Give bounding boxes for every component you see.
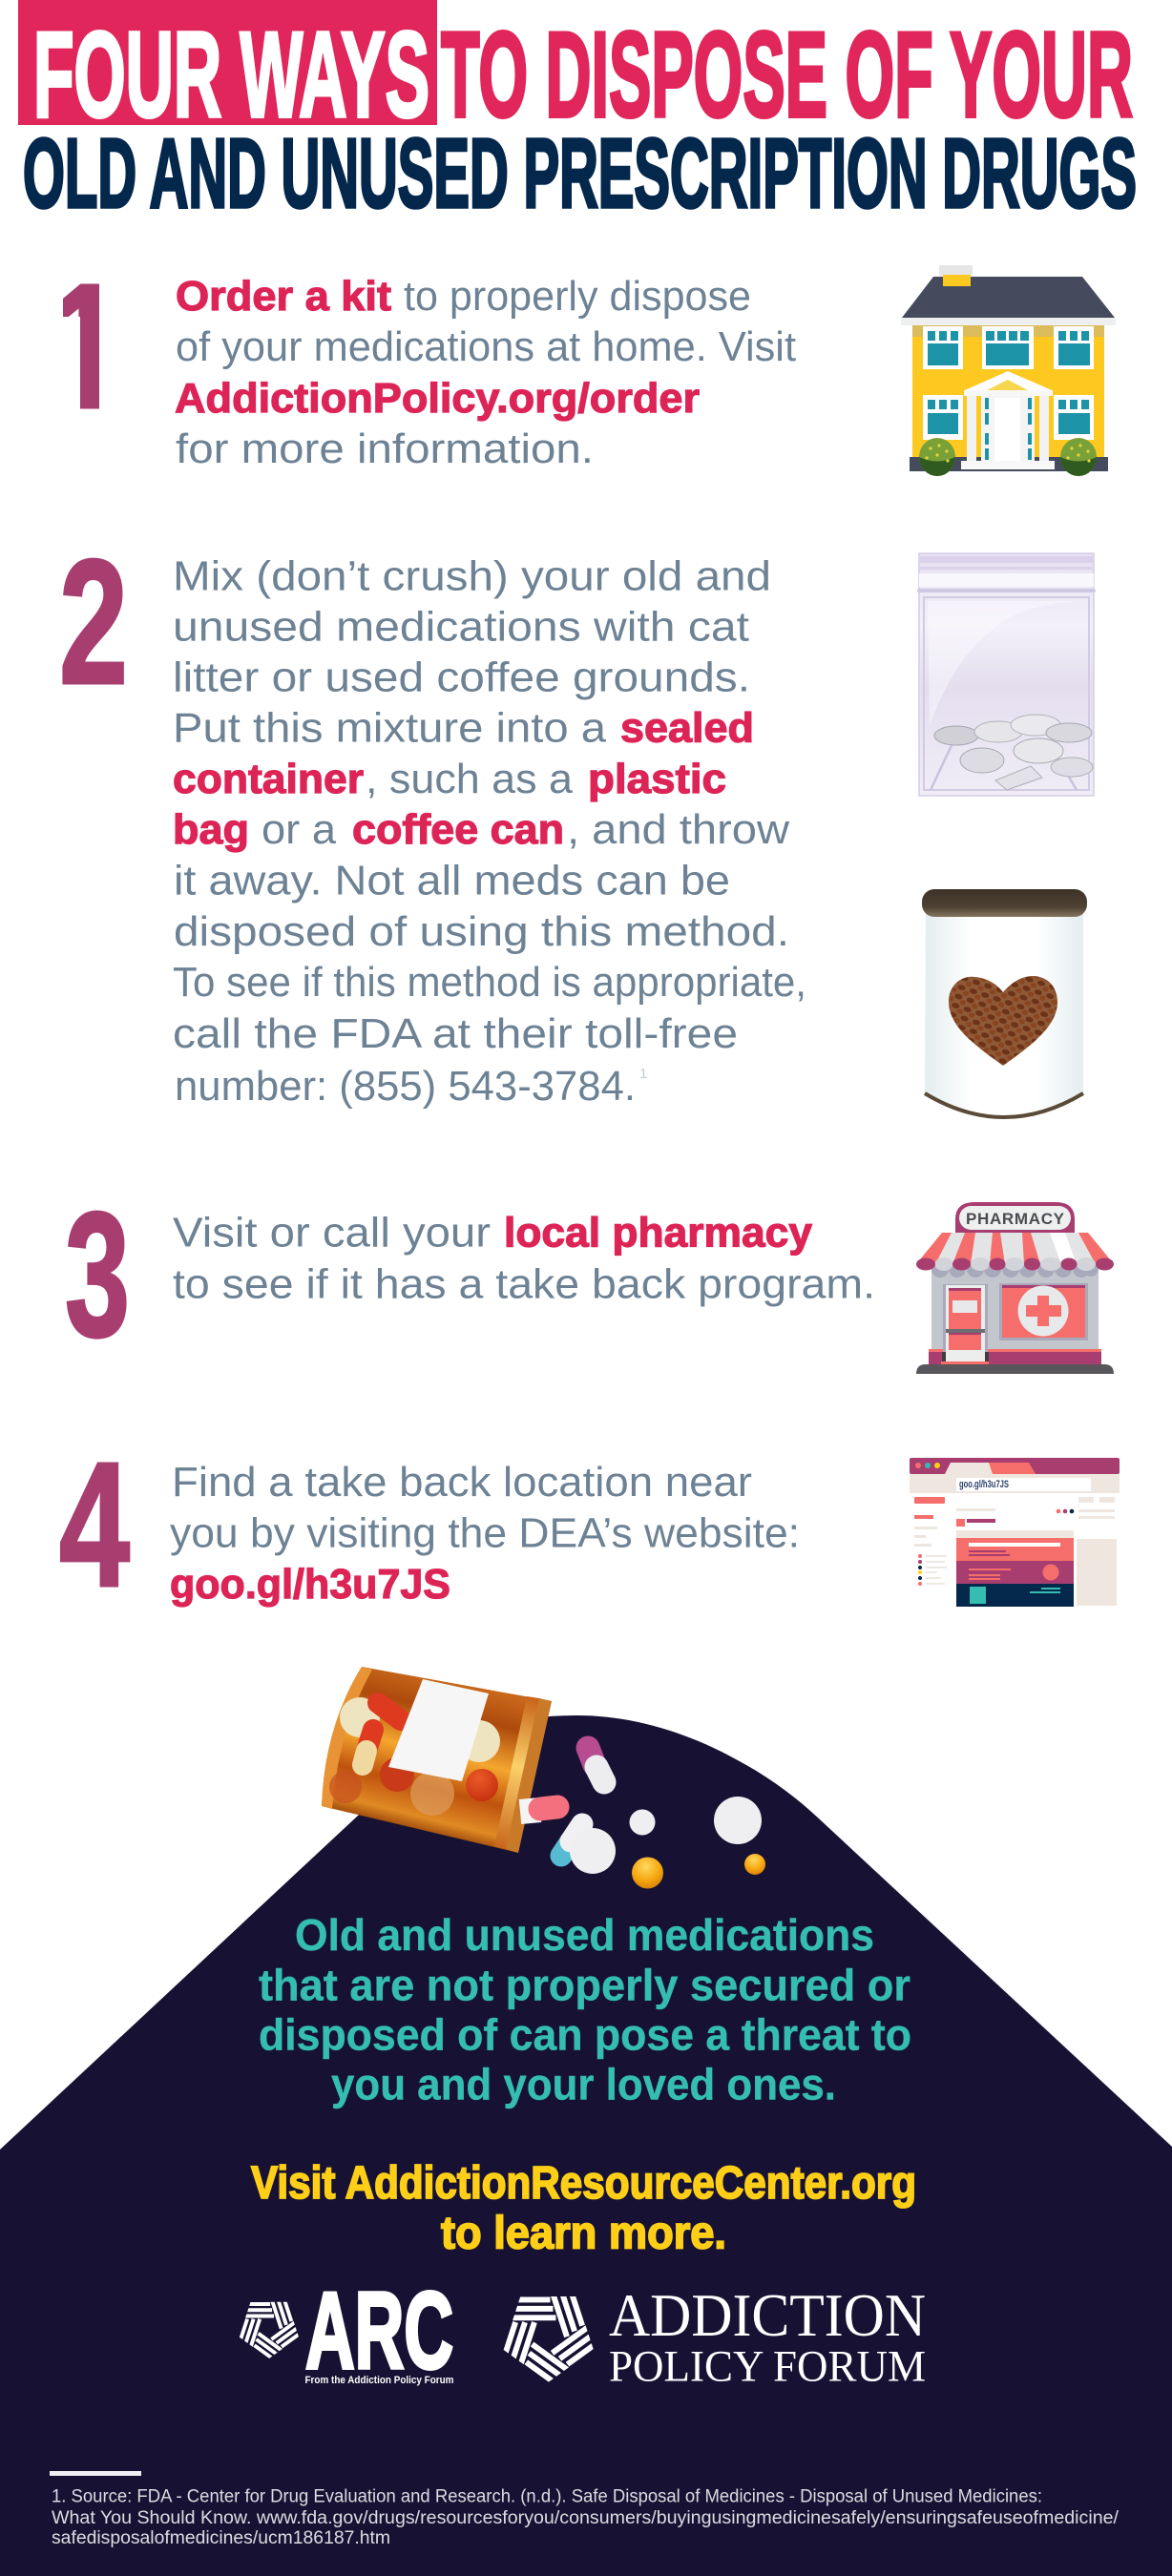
icon: APF pentagon mark (504, 2296, 594, 2381)
step 1 text: Order a kit (176, 273, 391, 320)
call to action: to learn more. (441, 2208, 726, 2259)
step 3 text: local pharmacy (504, 1210, 813, 1256)
step 2 text: Mix (don’t crush) your old and (173, 553, 771, 599)
step 2 text: disposed of using this method. (174, 908, 789, 955)
number 2: 2 (59, 524, 128, 721)
icon: house (901, 265, 1116, 476)
logo: ARC (239, 2290, 453, 2385)
pill: large white front (570, 1828, 616, 1874)
step 4 text: Find a take back location near (172, 1459, 752, 1506)
icon: coffee can with heart of beans (922, 889, 1087, 1117)
pill: gold large (632, 1857, 663, 1889)
step 2 text: 1 (639, 1066, 647, 1082)
step 2 text: call the FDA at their toll-free (173, 1010, 738, 1057)
step 2 text: sealed (620, 704, 754, 752)
capsule: pink and white (520, 1807, 557, 1812)
capsule: magenta and white (588, 1748, 604, 1782)
step 2 text: To see if this method is appropriate, (173, 959, 806, 1006)
callout: warning message: Old and unused medications (295, 1910, 874, 1960)
icon: ARC pentagon mark (239, 2301, 299, 2358)
capsule: blue and white (561, 1824, 582, 1856)
bottle label (388, 1679, 489, 1781)
number 3: 3 (65, 1176, 130, 1374)
step 2 text: container (173, 756, 364, 802)
title highlight box (18, 0, 437, 125)
number 1: 1 (48, 248, 124, 446)
step 2 (59, 524, 1096, 1117)
call to action: Visit AddictionResourceCenter.org (251, 2158, 916, 2209)
footnote rule (50, 2471, 141, 2476)
step 2 text (173, 553, 806, 1110)
step 2 text: , such as a (366, 756, 574, 802)
footnote text: What You Should Know. www.fda.gov/drugs/resourcesforyou/consumers/buyingusingmedicinesafely/ensuringsafeuseofmedicine/ (52, 2508, 1120, 2528)
call to action (251, 2158, 916, 2259)
step 2 text: it away. Not all meds can be (174, 857, 730, 904)
APF wordmark line 2: POLICY FORUM (609, 2341, 926, 2391)
step 1 (48, 248, 1116, 476)
step 1 text: for more information. (176, 426, 594, 472)
step 2 text: Put this mixture into a (173, 704, 607, 752)
step 4 (59, 1426, 1120, 1624)
footnote text: 1. Source: FDA - Center for Drug Evaluation and Research. (n.d.). Safe Disposal of Medicines - Disposal of Unused Medicines: (52, 2486, 1042, 2507)
step 3 text (173, 1210, 875, 1307)
logo: Addiction Policy Forum (504, 2296, 925, 2381)
step 2 text: coffee can (352, 806, 564, 853)
APF wordmark line 1: ADDICTION (609, 2281, 926, 2349)
panel: dark mountain background (0, 1715, 1172, 2576)
bottle (322, 1667, 552, 1853)
pill: large white right (714, 1797, 762, 1844)
step 4 text: you by visiting the DEA’s website: (170, 1509, 800, 1557)
callout: warning message: you and your loved ones. (331, 2059, 836, 2109)
step 4 text (170, 1459, 800, 1608)
number 4: 4 (59, 1426, 130, 1624)
icon: pharmacy storefront: PHARMACY (966, 1210, 1065, 1228)
step 1 text (175, 273, 796, 472)
step 1 text: AddictionPolicy.org/order (175, 375, 700, 422)
step 2 text: number: (855) 543-3784. (175, 1063, 636, 1110)
step 3 (65, 1176, 1114, 1374)
callout: warning message (259, 1910, 911, 2109)
ARC wordmark: ARC (305, 2271, 453, 2392)
step 2 text: unused medications with cat (173, 603, 749, 651)
footnote text (52, 2486, 1120, 2548)
step 3 text: Visit or call your (173, 1210, 491, 1256)
ARC tagline: From the Addiction Policy Forum (305, 2375, 454, 2386)
step 2 text: , and throw (567, 806, 789, 853)
title: four ways: FOUR WAYS (33, 7, 429, 142)
illustration: spilled pill bottle (322, 1667, 765, 1889)
step 1 text: to properly dispose (404, 273, 751, 320)
pill: gold small (744, 1854, 765, 1875)
footnote text: safedisposalofmedicines/ucm186187.htm (52, 2528, 390, 2548)
icon: pharmacy storefront (916, 1202, 1114, 1374)
title (18, 0, 1137, 228)
step 2 text: or a (262, 806, 337, 853)
icon: browser window: goo.gl/h3u7JS (959, 1479, 1009, 1490)
step 2 text: plastic (588, 756, 726, 802)
icon: plastic bag with pills (917, 553, 1096, 796)
step 4 text: goo.gl/h3u7JS (170, 1561, 450, 1608)
step 3 text: to see if it has a take back program. (173, 1261, 875, 1307)
callout: warning message: disposed of can pose a threat to (259, 2009, 911, 2059)
pill: small white (630, 1809, 655, 1836)
callout: warning message: that are not properly secured or (259, 1960, 910, 2009)
step 1 text: of your medications at home. Visit (176, 323, 796, 370)
icon: browser window (910, 1458, 1120, 1607)
step 2 text: litter or used coffee grounds. (173, 654, 750, 700)
step 2 text: bag (173, 806, 249, 853)
